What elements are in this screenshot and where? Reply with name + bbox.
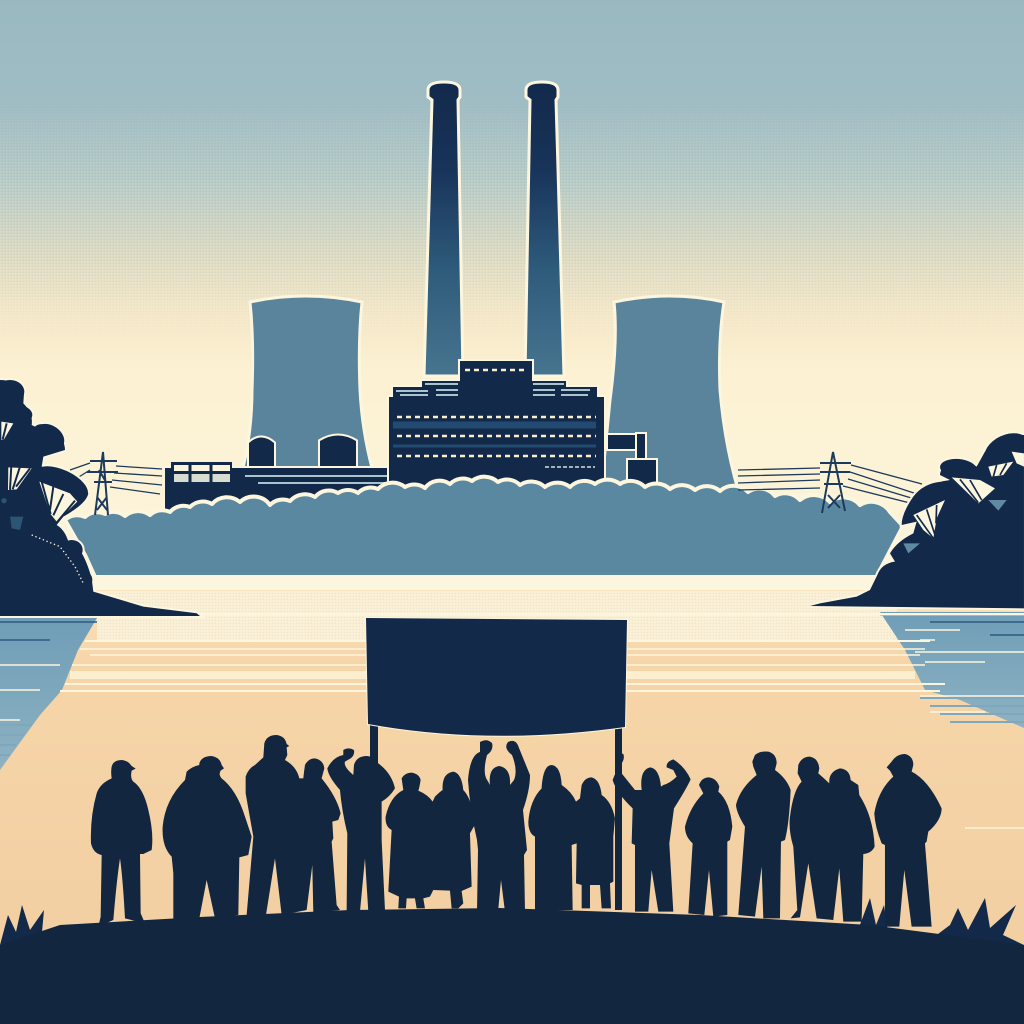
canopy silhouette xyxy=(810,427,1024,608)
water: stippled glow xyxy=(97,591,897,641)
railing with sky behind xyxy=(171,462,232,486)
main block xyxy=(389,361,604,490)
canopy halo xyxy=(810,427,1024,608)
dark water ripples xyxy=(0,615,1024,640)
grass tuft left xyxy=(0,905,72,945)
foreground ground xyxy=(0,908,1024,1024)
water: pale horizon xyxy=(90,577,890,591)
water: right blue xyxy=(880,612,1024,728)
banner pole left xyxy=(370,725,378,767)
person 2 xyxy=(163,756,252,920)
blank protest banner xyxy=(366,618,627,736)
left chimney xyxy=(424,82,463,376)
left cooling tower xyxy=(243,296,372,468)
canopy silhouette xyxy=(0,380,200,616)
lower windows xyxy=(545,466,595,468)
trunk lines xyxy=(917,463,1007,538)
left treed headland xyxy=(0,380,200,616)
roof highlights xyxy=(396,384,590,395)
persons 9 and 10 xyxy=(528,765,615,910)
trunks xyxy=(3,423,75,523)
cream line at headland base xyxy=(0,613,1024,616)
foliage glints xyxy=(903,500,1007,553)
stippled sky band xyxy=(0,114,1024,326)
persons 6 and 7 xyxy=(386,772,476,908)
low foliage glints xyxy=(1,498,23,530)
person 12 xyxy=(685,777,732,917)
person 8 both arms raised xyxy=(468,740,530,912)
water: left blue xyxy=(0,618,97,770)
person 3 and 4 xyxy=(246,735,341,915)
person 16 xyxy=(874,754,942,927)
blue floor bands xyxy=(393,425,596,446)
sky background xyxy=(0,0,1024,600)
banner pole right xyxy=(615,725,622,910)
right chimney xyxy=(525,82,564,376)
foliage dashes xyxy=(32,535,83,583)
reflection streaks xyxy=(0,630,1024,828)
left wing and tanks xyxy=(165,436,391,512)
power plant building xyxy=(165,361,656,512)
person 11 holding pole xyxy=(613,753,691,912)
right pylon and wires xyxy=(738,452,922,513)
persons 14 and 15 xyxy=(790,757,875,922)
left pylon and wires xyxy=(70,452,162,515)
crowd right half xyxy=(528,751,942,927)
water: sand reflection xyxy=(0,590,1024,960)
right side pipework xyxy=(608,434,656,492)
blue streaks on transition xyxy=(0,698,1024,755)
person 1 xyxy=(91,760,152,927)
wing window lines xyxy=(245,476,388,483)
person 5 raised fist xyxy=(327,748,395,912)
person 13 xyxy=(736,751,791,918)
distant tree line xyxy=(65,477,903,577)
right cooling tower xyxy=(600,296,742,503)
right treed headland xyxy=(810,427,1024,608)
canopy halo xyxy=(0,380,200,616)
sky gaps between canopies xyxy=(913,452,1024,538)
window rows xyxy=(397,370,596,456)
sky gaps between canopies xyxy=(1,422,77,522)
crowd left half xyxy=(91,735,476,927)
grass tuft middle xyxy=(858,898,888,932)
grass tuft right xyxy=(930,898,1024,945)
